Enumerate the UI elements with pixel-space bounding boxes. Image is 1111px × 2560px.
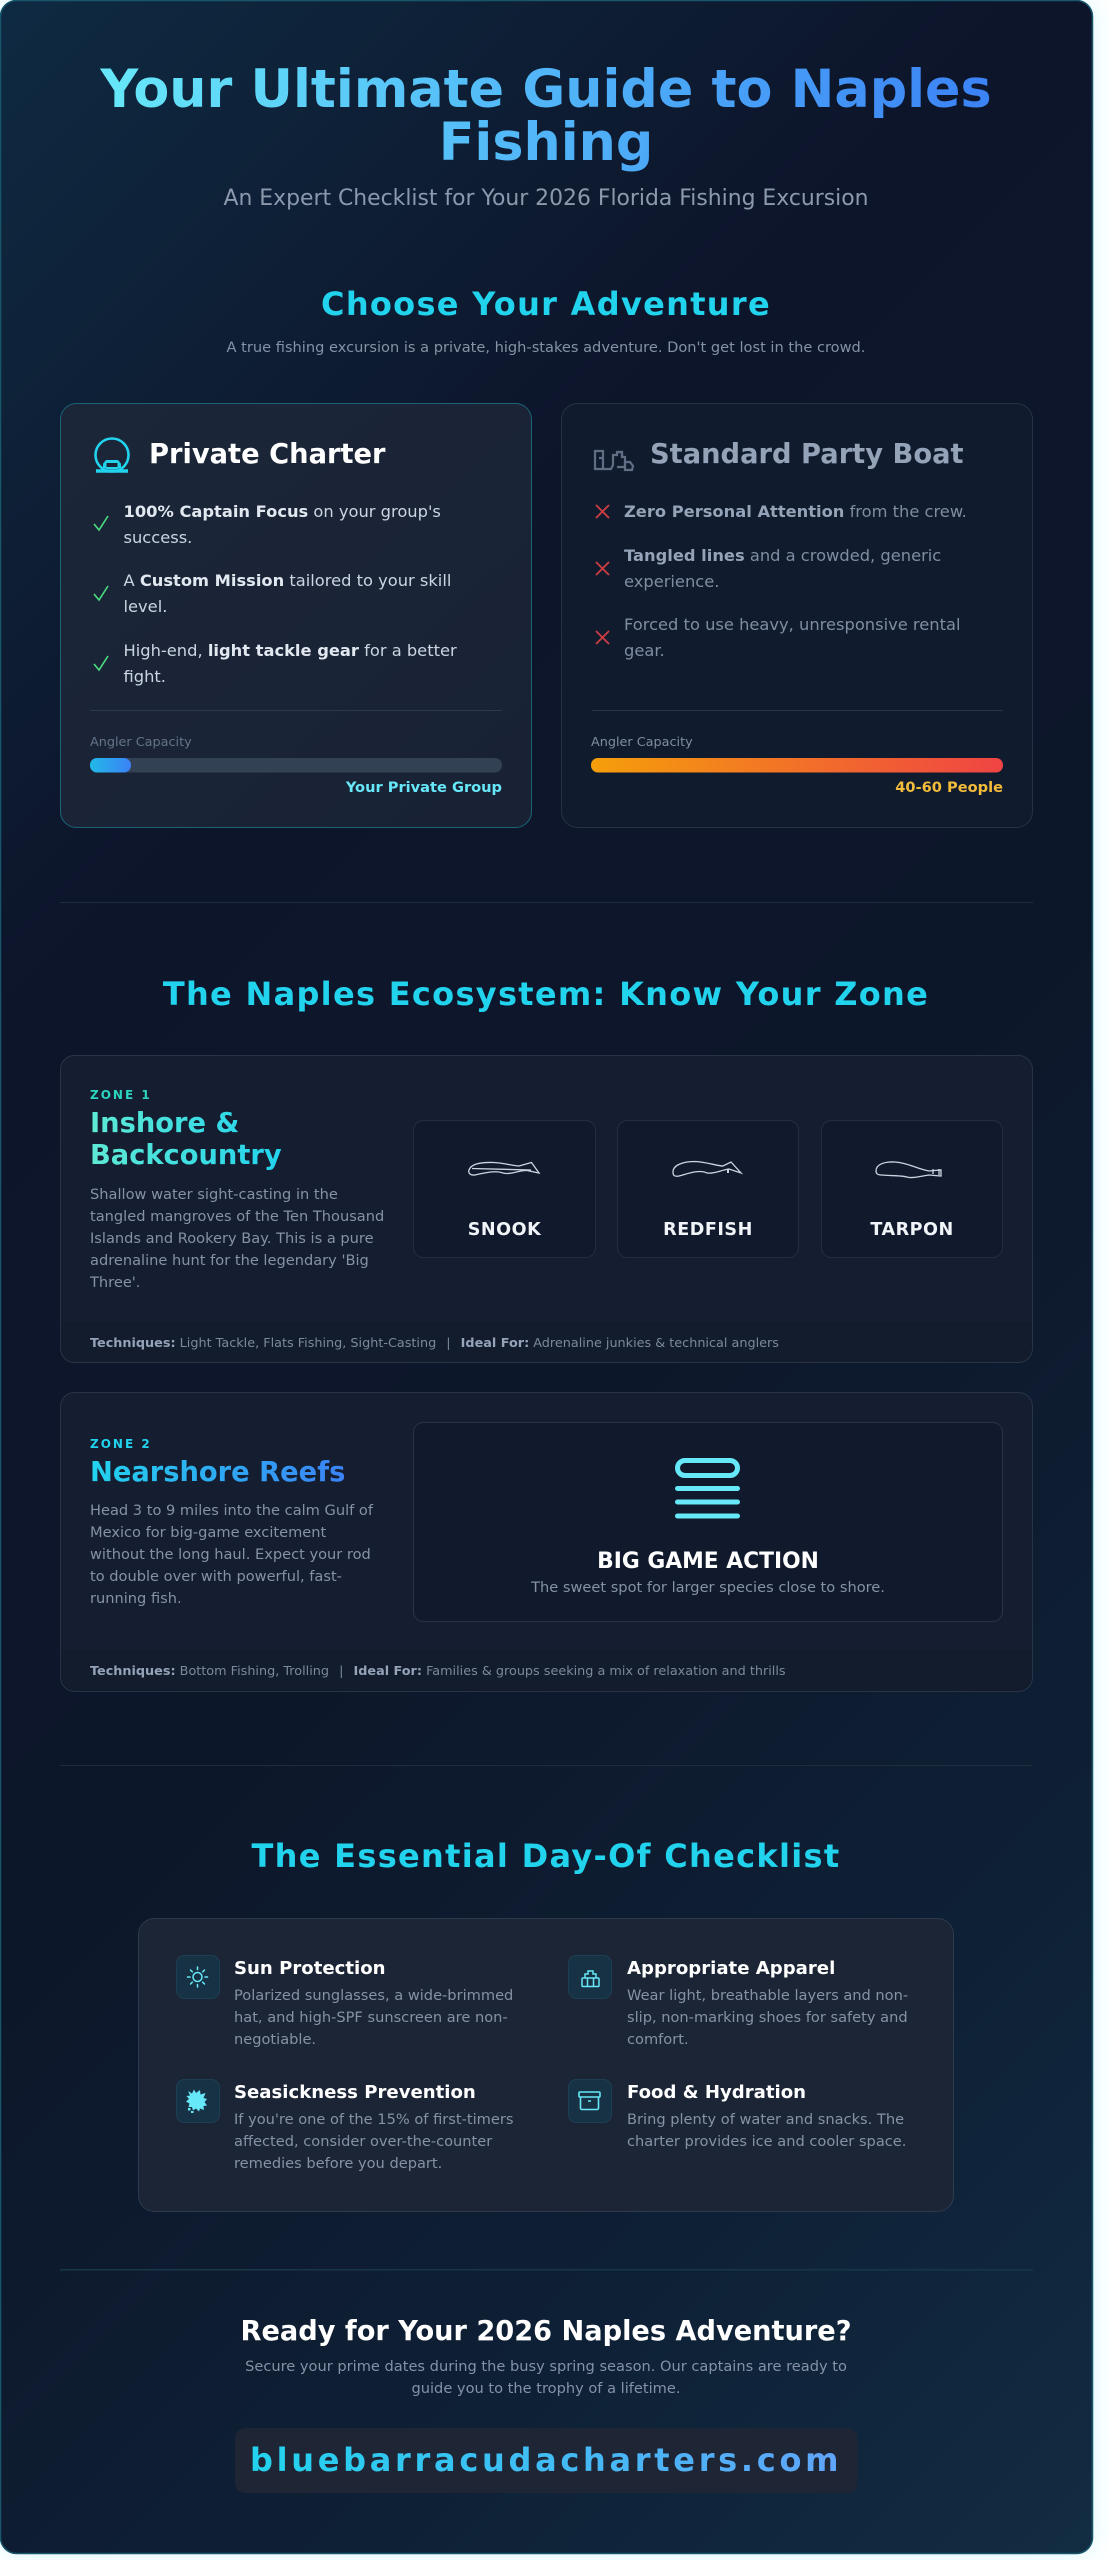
item: food and hydration [568,2080,906,2150]
list: party boat drawbacks [596,502,967,660]
zone label: ZONE 2 [90,1437,152,1451]
big game action card: BIG GAME ACTION [597,1549,819,1574]
cross item 3: Forced to use heavy, unresponsive rental [624,615,960,634]
check item 1 [94,502,441,547]
species card: redfish: REDFISH [663,1220,753,1240]
title: Your Ultimate Guide to Naples [99,59,992,120]
heading: standard party boat: Standard Party Boat [650,439,964,470]
check item 1: success. [124,528,192,547]
item: food and hydration: Bring plenty of water and snacks. The [627,2111,904,2128]
zone description: Three'. [89,1274,140,1291]
panel: private charter [60,404,532,828]
panel: zone 2 [60,1392,1032,1692]
item: seasickness prevention: If you're one of the 15% of first-timers [234,2111,513,2128]
list: charter benefits [94,502,457,686]
zone description: Shallow water sight-casting in the [90,1186,338,1203]
zone description: to double over with powerful, fast- [90,1568,342,1585]
heading: private charter: Private Charter [149,439,386,470]
zone description: Mexico for big-game excitement [90,1524,327,1541]
item: sun protection: hat, and high-SPF sunscreen are non- [234,2009,508,2026]
item: sun protection: negotiable. [234,2031,316,2048]
panel: zone 1 [60,1056,1032,1362]
cross item 2: Tangled lines and a crowded, generic [624,546,941,565]
check item 3: fight. [124,667,166,686]
item: appropriate apparel: comfort. [627,2031,689,2048]
big game action card: The sweet spot for larger species close to shore. [530,1579,885,1596]
check item 2: level. [124,597,167,616]
check item 3 [94,641,457,686]
icon: seasickness [186,2090,207,2113]
capacity bar: private [90,735,502,796]
zone footer: techniques: Techniques: Bottom Fishing, Trolling | Ideal For: Families & groups seeking a mix of relaxation and thrills [90,1664,786,1679]
check item 3: High-end, light tackle gear for a better [124,641,457,660]
text: call to action [245,2358,847,2397]
check item 2 [94,571,451,616]
cross item 2 [596,546,941,591]
zone heading: Inshore & [90,1108,239,1139]
icon: apparel [582,1971,599,1986]
zone heading [90,1108,282,1171]
item: food and hydration: charter provides ice and cooler space. [627,2133,906,2150]
species card: tarpon: TARPON [870,1220,954,1240]
species card: tarpon [822,1120,1002,1258]
zone description: running fish. [90,1590,182,1607]
item: appropriate apparel [568,1956,908,2048]
capacity bar: party boat: Angler Capacity [591,735,693,750]
zone description: Head 3 to 9 miles into the calm Gulf of [90,1502,374,1519]
heading: day-of checklist: The Essential Day-Of Checklist [252,1837,840,1875]
big game action card [414,1422,1002,1622]
capacity bar: party boat: 40-60 People [895,779,1003,796]
cross item 3: gear. [624,641,665,660]
icon: big game [678,1460,738,1516]
zone description [89,1186,384,1291]
text: call to action: guide you to the trophy of a lifetime. [411,2380,681,2397]
heading: call to action: Ready for Your 2026 Naples Adventure? [241,2316,851,2347]
species card: snook [414,1120,596,1258]
subtitle: An Expert Checklist for Your 2026 Florida Fishing Excursion [223,186,869,211]
item: sun protection: Polarized sunglasses, a wide-brimmed [234,1987,513,2004]
capacity bar: private: Angler Capacity [90,735,192,750]
website link: bluebarracudacharters.com [250,2441,842,2479]
zone description [90,1502,374,1607]
item: sun protection: Sun Protection [234,1958,386,1979]
panel: checklist [138,1918,954,2212]
icon: helm [96,438,128,472]
capacity bar: party boat [591,735,1003,796]
heading: naples ecosystem: The Naples Ecosystem: Know Your Zone [163,975,929,1013]
item: seasickness prevention: Seasickness Prevention [234,2082,476,2103]
zone label: ZONE 1 [90,1088,152,1102]
text: adventure intro: A true fishing excursion is a private, high-stakes adventure. Don't get lost in the crowd. [227,339,865,356]
check item 2: A Custom Mission tailored to your skill [124,571,451,590]
item: appropriate apparel: Appropriate Apparel [627,1958,835,1979]
item: seasickness prevention: remedies before you depart. [234,2155,442,2172]
icon: party boat [595,451,633,470]
species card: snook: SNOOK [468,1220,542,1240]
cross item 3 [596,615,960,660]
icon: sun [188,1967,208,1987]
zone description: Islands and Rookery Bay. This is a pure [90,1230,374,1247]
title: Fishing [439,112,653,173]
panel: standard party boat [562,404,1032,828]
item: appropriate apparel: slip, non-marking shoes for safety and [627,2009,908,2026]
item: sun protection [176,1956,513,2048]
text: call to action: Secure your prime dates during the busy spring season. Our captains are ready to [245,2358,847,2375]
zone description: without the long haul. Expect your rod [90,1546,371,1563]
item: food and hydration: Food & Hydration [627,2082,806,2103]
website link [235,2428,858,2493]
zone description: tangled mangroves of the Ten Thousand [90,1208,384,1225]
zone heading: Backcountry [90,1140,282,1171]
item: appropriate apparel: Wear light, breathable layers and non- [627,1987,908,2004]
heading: choose your adventure: Choose Your Adventure [321,285,771,323]
capacity bar: private: Your Private Group [345,779,502,796]
icon: cooler box [579,2092,600,2110]
zone description: adrenaline hunt for the legendary 'Big [90,1252,369,1269]
check item 1: 100% Captain Focus on your group's [124,502,441,521]
item: seasickness prevention: affected, consider over-the-counter [234,2133,492,2150]
zone footer: techniques: Techniques: Light Tackle, Flats Fishing, Sight-Casting | Ideal For: Adrenaline junkies & technical anglers [90,1336,779,1351]
cross item 2: experience. [624,572,719,591]
zone heading: Nearshore Reefs [90,1457,345,1488]
cross item 1: Zero Personal Attention from the crew. [624,502,967,521]
species card: redfish [618,1120,798,1258]
item: seasickness prevention [176,2080,513,2172]
title [99,59,992,173]
